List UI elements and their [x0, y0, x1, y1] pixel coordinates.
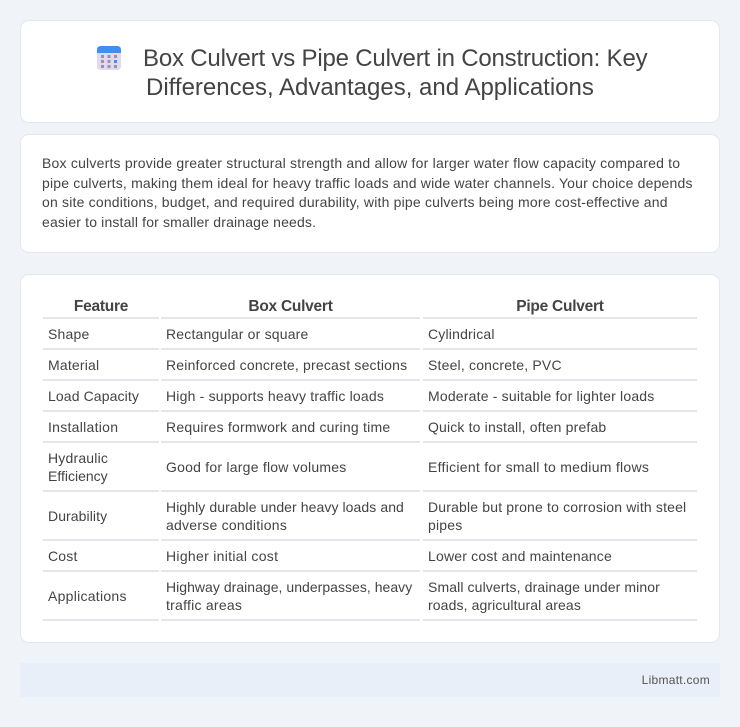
row: applications: roads, agricultural areas [428, 597, 581, 613]
panel: comparison table [20, 274, 720, 643]
table header row [74, 298, 604, 315]
row: hydraulic efficiency: Hydraulic [48, 450, 108, 466]
row: installation: Requires formwork and curing time [166, 419, 390, 435]
row: durability: Durability [48, 508, 107, 524]
row: durability [48, 499, 686, 533]
row: cost [48, 548, 612, 564]
row: installation: Quick to install, often prefab [428, 419, 606, 435]
table header row: Feature [74, 298, 128, 315]
summary paragraph: pipe culverts, making them ideal for heavy traffic loads and wide water channels. Your choice depends [42, 175, 693, 191]
panel: summary text [20, 134, 720, 253]
title: Differences, Advantages, and Applications [146, 74, 594, 101]
footer text: Libmatt.com [642, 673, 710, 687]
row: applications: Highway drainage, underpasses, heavy [166, 579, 412, 595]
row: installation: Installation [48, 419, 118, 435]
row: load capacity: Load Capacity [48, 388, 139, 404]
row: durability: Durable but prone to corrosion with steel [428, 499, 686, 515]
row: cost: Cost [48, 548, 78, 564]
row: load capacity [48, 388, 654, 404]
row: hydraulic efficiency [48, 450, 649, 484]
summary paragraph: easier to install for smaller drainage needs. [42, 214, 316, 230]
row: material: Material [48, 357, 99, 373]
row: applications: Small culverts, drainage under minor [428, 579, 660, 595]
row: durability: Highly durable under heavy loads and [166, 499, 404, 515]
row: durability: pipes [428, 517, 462, 533]
summary paragraph [42, 155, 693, 230]
footer bar [20, 663, 720, 697]
table header row: Pipe Culvert [516, 298, 604, 315]
row: hydraulic efficiency: Efficient for small to medium flows [428, 459, 649, 475]
row: applications: Applications [48, 588, 127, 604]
table header row: Box Culvert [248, 298, 333, 315]
summary paragraph: on site conditions, budget, and required durability, with pipe culverts being more cost-effective and [42, 194, 668, 210]
row: material: Reinforced concrete, precast sections [166, 357, 407, 373]
row: cost: Higher initial cost [166, 548, 278, 564]
row: applications [48, 579, 660, 613]
row: load capacity: High - supports heavy traffic loads [166, 388, 384, 404]
row: shape [48, 326, 495, 342]
row: hydraulic efficiency: Efficiency [48, 468, 108, 484]
row: durability: adverse conditions [166, 517, 287, 533]
summary paragraph: Box culverts provide greater structural strength and allow for larger water flow capacity compared to [42, 155, 680, 171]
row: installation [48, 419, 606, 435]
comparison table [43, 298, 697, 621]
row: hydraulic efficiency: Good for large flow volumes [166, 459, 347, 475]
row: shape: Shape [48, 326, 89, 342]
title [143, 45, 648, 101]
icon: calendar [97, 46, 121, 70]
title: Box Culvert vs Pipe Culvert in Construction: Key [143, 45, 647, 72]
row: load capacity: Moderate - suitable for lighter loads [428, 388, 654, 404]
row: material: Steel, concrete, PVC [428, 357, 562, 373]
row: applications: traffic areas [166, 597, 242, 613]
row: material [48, 357, 562, 373]
row: cost: Lower cost and maintenance [428, 548, 612, 564]
row: shape: Cylindrical [428, 326, 495, 342]
row: shape: Rectangular or square [166, 326, 309, 342]
panel: header [20, 20, 720, 123]
